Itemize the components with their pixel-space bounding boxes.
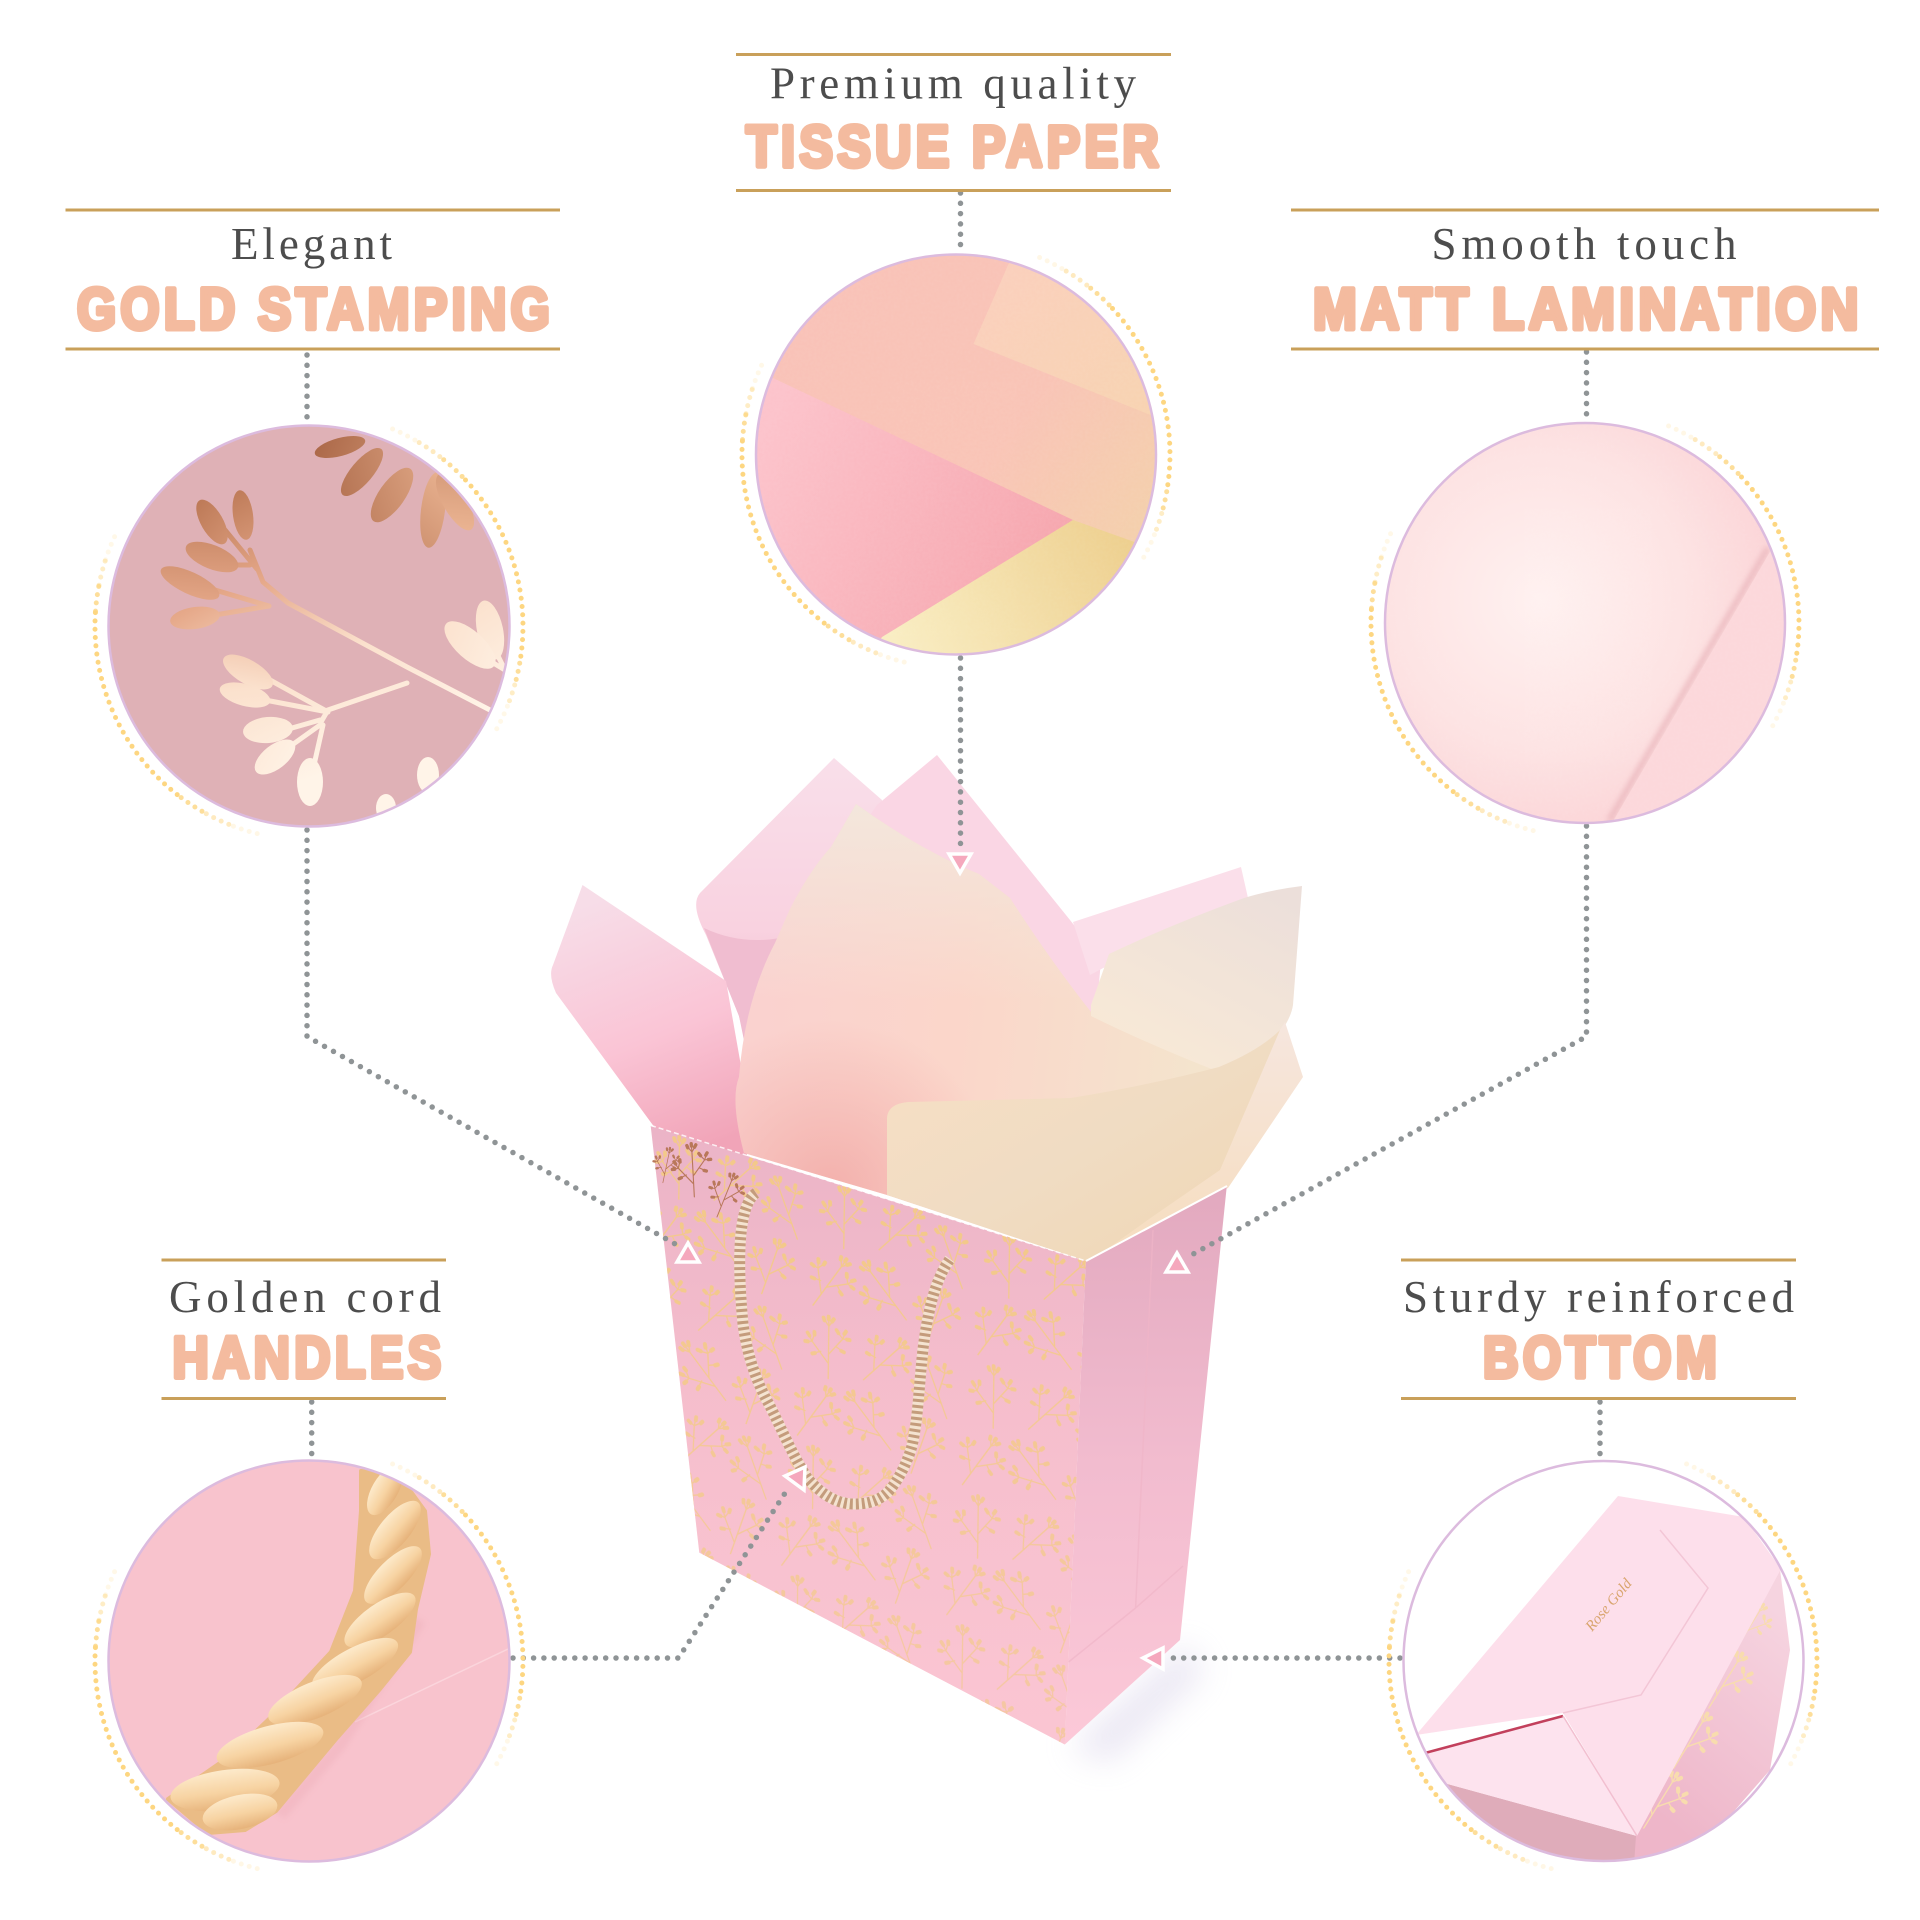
heading: tissue paper: [736, 54, 1171, 190]
side panel creases: [1069, 1230, 1183, 1662]
tissue: curled underside of back left petal: [704, 928, 780, 1040]
circle outline: [1404, 1461, 1804, 1861]
heading: handles: Golden cord: [169, 1272, 441, 1322]
brand mark: Rose Gold: [1582, 1576, 1636, 1635]
circle outline: [756, 254, 1156, 654]
copper sprigs near the top corner: [650, 1142, 749, 1223]
heading: gold stamping: GOLD STAMPING: [77, 277, 554, 342]
bag top edge: [651, 1126, 1086, 1261]
tissue: front cream sheet: [887, 1030, 1280, 1262]
tissue: central blush sheet: [735, 804, 1244, 1262]
heading: matt lamination: [1291, 210, 1879, 349]
circle: tissue sheets close-up: [757, 256, 1155, 654]
bag shadow: [1070, 1645, 1205, 1762]
tissue: right cream petal: [1091, 886, 1302, 1072]
floral foil pattern: [651, 1126, 1086, 1744]
dotted ring: [95, 429, 523, 834]
tissue: back right pink petal: [860, 755, 1101, 1030]
heading: bottom: BOTTOM: [1483, 1326, 1721, 1390]
heading: handles: [162, 1260, 446, 1398]
dotted ring: [1389, 1464, 1817, 1869]
dotted ring: [742, 258, 1170, 662]
tissue: far right pink petal: [1073, 867, 1248, 975]
rope handle: [740, 1193, 950, 1504]
heading: matt lamination: MATT LAMINATION: [1313, 277, 1863, 342]
connector: handles: [312, 1402, 787, 1658]
circle: bag underside close-up: [1418, 1496, 1790, 1860]
connector: gold stamping: [307, 355, 677, 1245]
marker: gold stamping: [677, 1243, 699, 1262]
panel: gold stamping: [66, 210, 560, 840]
connector: matt lamination: [1186, 352, 1586, 1258]
circle: foil leaves close-up: [100, 420, 520, 840]
heading: tissue paper: Premium quality: [770, 58, 1136, 108]
marker: matt lamination: [1166, 1253, 1188, 1272]
connector: tissue paper: [958, 193, 963, 852]
tissue: lower right cream petal: [1089, 1022, 1303, 1262]
circle: twisted cord close-up: [100, 1455, 520, 1875]
heading: bottom: Sturdy reinforced: [1403, 1272, 1794, 1322]
panel: sturdy reinforced bottom: [1389, 1260, 1817, 1875]
heading: matt lamination: Smooth touch: [1432, 219, 1736, 269]
circle outline: [108, 1460, 510, 1862]
marker: tissue paper: [949, 854, 971, 873]
panel: golden cord handles: [95, 1260, 523, 1875]
side panel top edge: [1086, 1186, 1227, 1261]
pattern fade toward the bottom: [651, 1126, 1086, 1744]
heading: tissue paper: TISSUE PAPER: [746, 114, 1163, 180]
bag side panel: [1065, 1187, 1227, 1744]
heading: bottom: [1401, 1260, 1796, 1398]
tissue: back left pink petal: [696, 758, 882, 1045]
circle outline: [108, 426, 510, 826]
heading: gold stamping: [66, 210, 560, 349]
tissue: left pink petal: [551, 885, 747, 1160]
bag front panel: [651, 1126, 1086, 1744]
circle: laminated surface close-up: [1380, 418, 1800, 830]
marker: handles: [785, 1467, 805, 1490]
gift bag with tissue paper: [551, 755, 1303, 1762]
heading: handles: HANDLES: [172, 1326, 446, 1390]
panel: tissue paper: [736, 54, 1171, 670]
dotted ring: [1371, 426, 1799, 831]
panel: matt lamination: [1291, 210, 1879, 831]
marker: bottom: [1143, 1648, 1163, 1669]
connector: bottom: [1168, 1402, 1600, 1658]
dotted ring: [95, 1464, 523, 1869]
heading: gold stamping: Elegant: [231, 219, 392, 269]
circle outline: [1385, 423, 1785, 823]
